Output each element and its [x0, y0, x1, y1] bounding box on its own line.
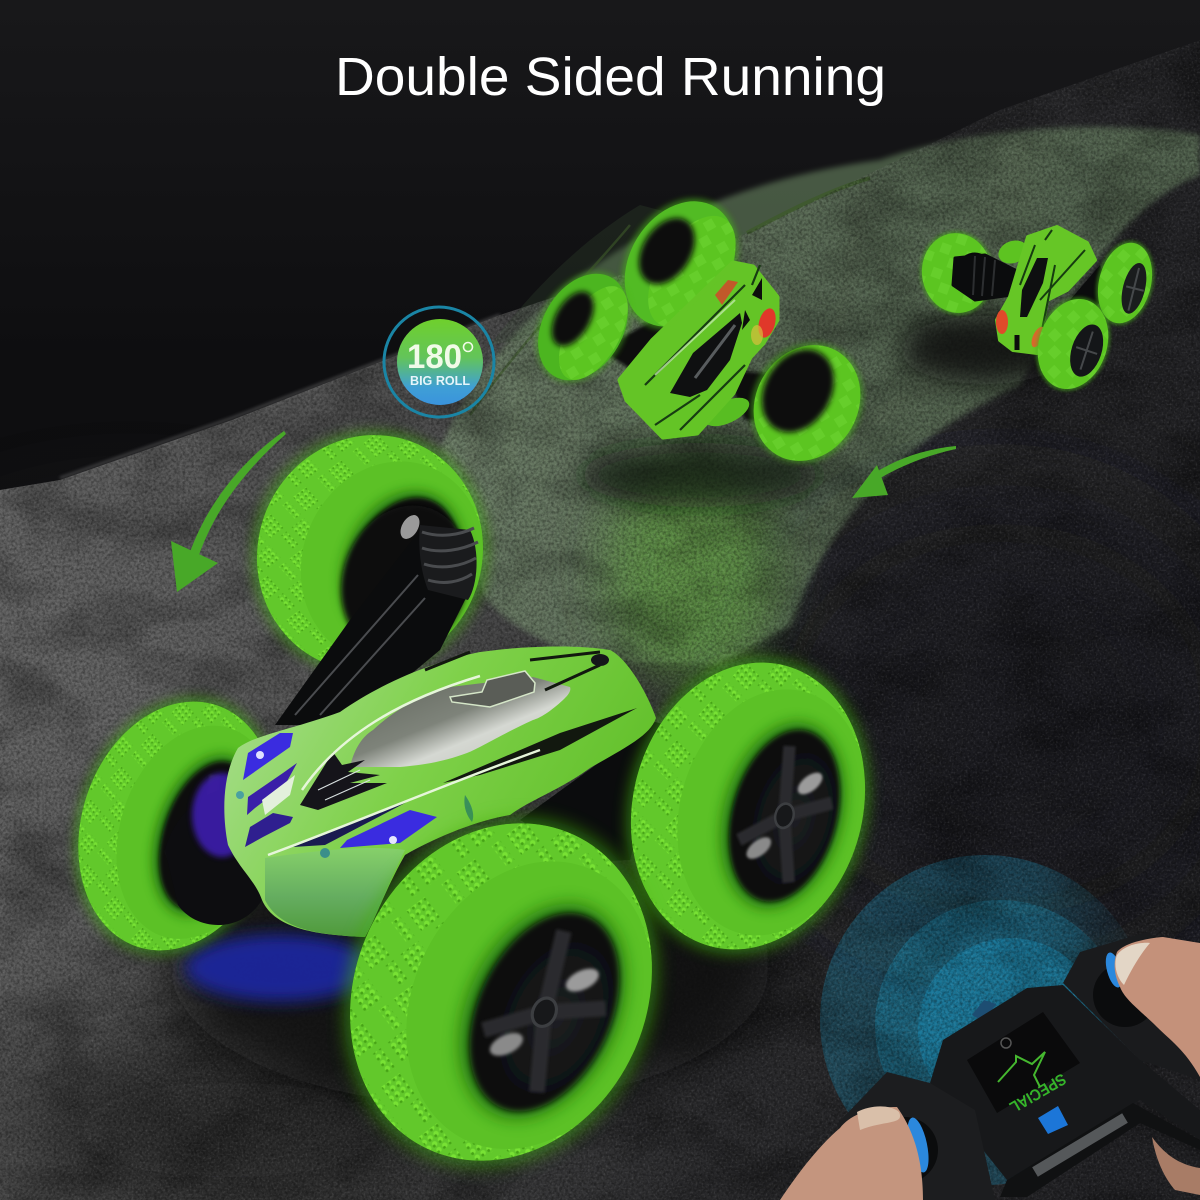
remote signal waves: [820, 855, 1150, 1185]
purple glow on left hub: [192, 773, 252, 857]
upper car wheel top: [598, 177, 762, 351]
left grip: [838, 1072, 995, 1200]
arrow: right curved: [852, 446, 956, 498]
upper car wheel left: [517, 255, 649, 399]
title: Double Sided Running: [335, 47, 886, 107]
right lower fingers: [1152, 1137, 1200, 1195]
right car rear fender: [995, 237, 1031, 267]
right car axle spring: [953, 255, 1110, 320]
main car front wheel: [288, 765, 714, 1200]
right car rear right wheel: [1087, 235, 1163, 331]
shadow under car: [170, 825, 770, 1105]
upper car wheel right: [729, 322, 885, 484]
blue switch: [1038, 1106, 1068, 1134]
white highlight lines: [268, 676, 540, 855]
display screen: SPECIAL: [1006, 1070, 1068, 1115]
badge: 180 big roll: BIG ROLL: [410, 374, 470, 388]
black star decal: [300, 752, 387, 810]
upper car body: [620, 263, 779, 437]
side vent: [247, 763, 297, 815]
remote controller: [780, 932, 1200, 1200]
remote antenna: [972, 1000, 996, 1022]
right car body: [996, 227, 1095, 353]
display screen: [967, 1012, 1080, 1115]
main car right wheel: [593, 630, 903, 982]
right joystick: [1093, 951, 1157, 1027]
right car on road: [915, 226, 1163, 401]
blue headlight left: [243, 733, 293, 780]
front axle dark: [165, 788, 262, 925]
black side stripes: [443, 708, 637, 783]
right car left wheel: [915, 226, 1000, 320]
controller center body: [930, 985, 1200, 1180]
badge: 180 big roll: 180: [407, 338, 462, 376]
lower strip: [1000, 1103, 1200, 1197]
windshield: [350, 677, 570, 767]
right thumb hand: [1115, 937, 1200, 1077]
rear hub and axle spring: [275, 487, 489, 725]
main car rear wheel: [216, 395, 524, 711]
arrow: left curved: [171, 431, 286, 592]
right car front wheel: [1024, 287, 1122, 401]
upper car lower fender: [701, 392, 753, 432]
main car: [42, 395, 903, 1200]
badge: 180 big roll: [384, 307, 494, 417]
right grip: [1063, 932, 1200, 1080]
rear antenna knob: [591, 654, 609, 666]
roof panel: [450, 671, 535, 707]
chassis dark: [520, 722, 668, 862]
car shadows on trail: [580, 316, 1070, 507]
main car left wheel: [42, 670, 312, 982]
upper car axles: [600, 310, 800, 425]
car body shell: [224, 646, 656, 937]
blue headlight right: [340, 810, 437, 848]
green motion trail: [440, 127, 1200, 685]
left joystick: [872, 1116, 938, 1183]
upper car mid roll: [517, 177, 885, 484]
left thumb hand: [780, 1106, 923, 1200]
